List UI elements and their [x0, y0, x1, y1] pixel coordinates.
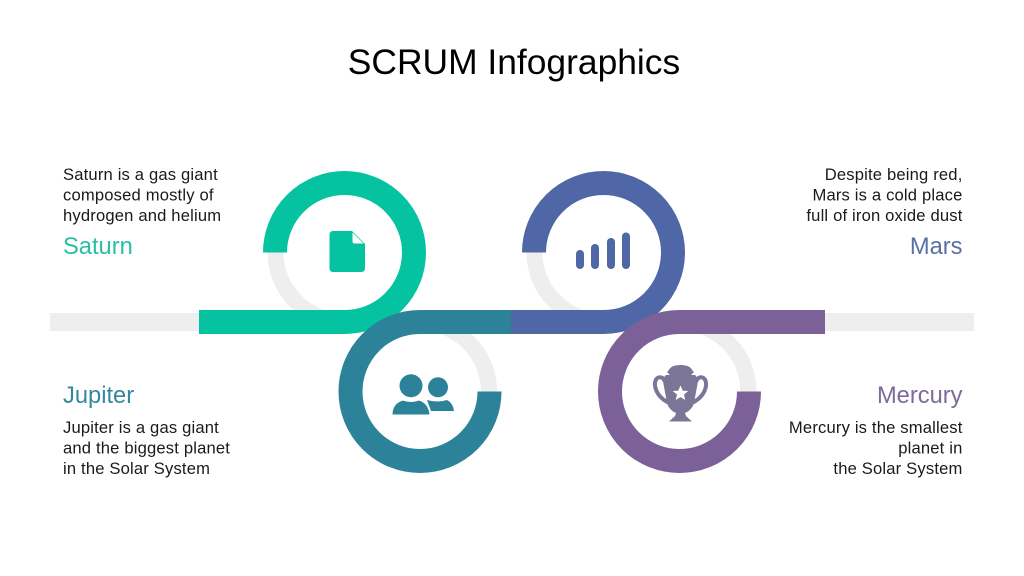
text block: Mercury: the Solar System	[833, 459, 962, 478]
grey arc: Jupiter	[420, 322, 489, 392]
text block: Saturn: hydrogen and helium	[63, 206, 221, 225]
text block: Jupiter	[63, 383, 230, 478]
text block: Mars: full of iron oxide dust	[806, 206, 963, 225]
text block: Saturn	[63, 165, 221, 260]
icon: trophy	[655, 365, 706, 422]
text block: Mercury	[789, 383, 963, 478]
heading: Jupiter: Jupiter	[63, 383, 134, 409]
ribbon: Jupiter	[350, 322, 511, 461]
icon: users	[392, 374, 454, 415]
heading: Mars: Mars	[910, 234, 962, 260]
heading: Mercury: Mercury	[877, 383, 963, 409]
text block: Jupiter: Jupiter is a gas giant	[63, 418, 219, 437]
grey arc: Saturn	[276, 252, 344, 322]
text block: Saturn: Saturn is a gas giant	[63, 165, 218, 184]
ribbon: Mars	[511, 183, 673, 322]
ribbon: Saturn	[199, 183, 414, 322]
background track	[50, 313, 974, 331]
icon: bar signal	[576, 232, 630, 269]
grey arc: Mercury	[680, 322, 748, 392]
text block: Jupiter: and the biggest planet	[63, 438, 230, 458]
text block: Mars: Mars is a cold place	[812, 186, 962, 204]
text block: Mars: Despite being red,	[825, 165, 962, 184]
heading: Saturn: Saturn	[63, 234, 133, 260]
text block: Mars	[806, 165, 963, 260]
text block: Jupiter: in the Solar System	[63, 459, 210, 478]
ribbon: Mercury	[610, 322, 825, 461]
text block: Mercury: Mercury is the smallest	[789, 418, 963, 437]
grey arc: Mars	[534, 252, 604, 322]
text block: Saturn: composed mostly of	[63, 186, 214, 204]
icon: document	[330, 231, 365, 272]
text block: Mercury: planet in	[898, 438, 962, 458]
title: SCRUM Infographics	[348, 42, 680, 82]
